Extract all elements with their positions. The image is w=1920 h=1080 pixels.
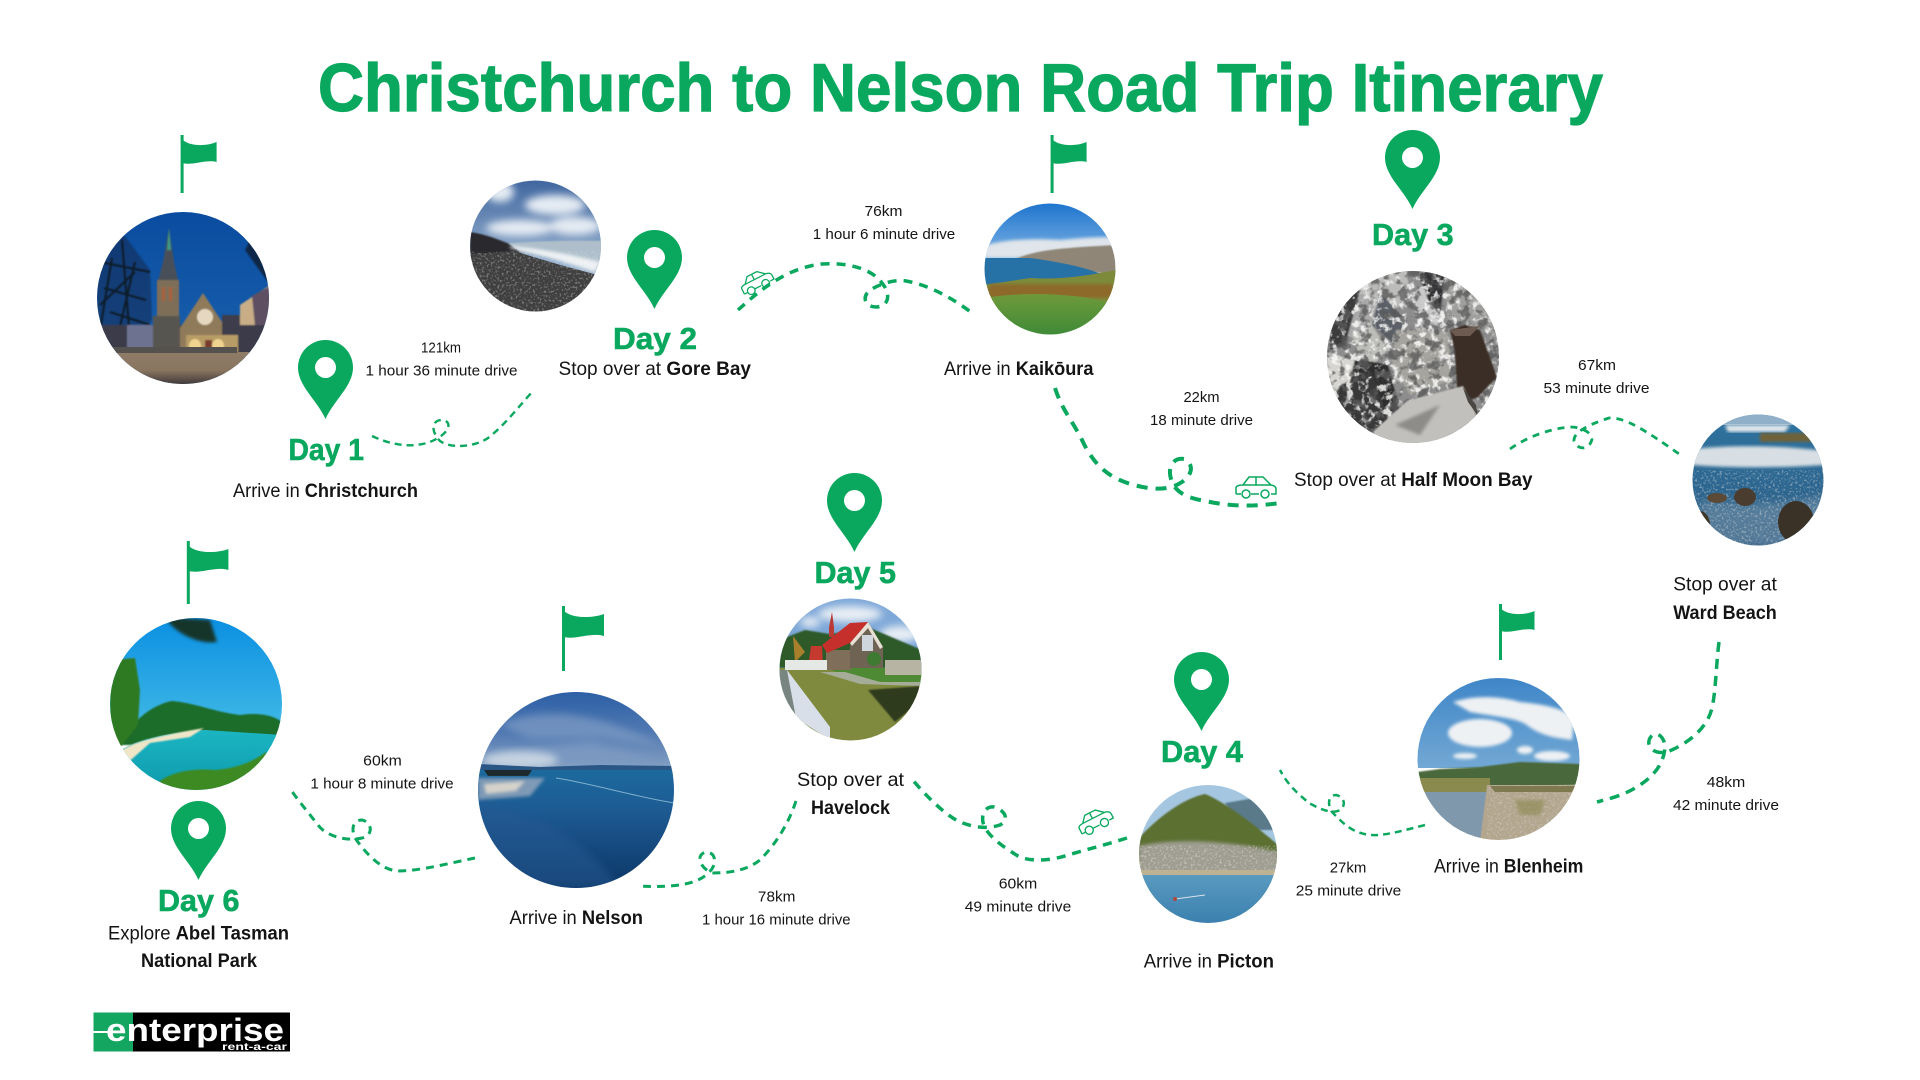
text: Arrive in Nelson: Arrive in Nelson — [510, 907, 643, 929]
route: Gore Bay to Kaikoura — [738, 264, 972, 313]
heading: Day 6: Day 6 — [158, 883, 240, 918]
text: Stop over at Ward Beach: Ward Beach — [1673, 602, 1777, 624]
text: distance Havelock to Nelson — [702, 889, 851, 929]
logo: enterprise rent-a-car: enterprise — [106, 1012, 284, 1048]
text: Arrive in Picton: Arrive in Picton — [1144, 951, 1274, 973]
text: Arrive in Christchurch: Arrive in Christchurch — [233, 480, 418, 502]
text: distance Havelock to Picton: 60km — [999, 876, 1037, 892]
logo: enterprise rent-a-car: rent-a-car — [222, 1041, 287, 1053]
text: distance Picton to Blenheim: 25 minute drive — [1296, 883, 1401, 900]
text: Arrive in Blenheim: Arrive in Blenheim — [1434, 856, 1583, 878]
text: distance Gore Bay to Kaikoura: 76km — [864, 203, 902, 220]
text: distance Havelock to Nelson: 78km — [758, 889, 795, 906]
photo: Blenheim river — [1417, 678, 1580, 842]
route: Nelson to Abel Tasman — [291, 790, 475, 871]
icon: flag Blenheim — [1499, 604, 1534, 660]
text: distance Christchurch to Gore Bay: 1 hour 36 minute drive — [366, 363, 518, 380]
text: distance Nelson to Abel Tasman: 60km — [363, 753, 402, 770]
icon: flag Kaikoura — [1051, 135, 1087, 193]
icon: pin Day 2 — [627, 230, 682, 309]
heading: Day 2: Day 2 — [613, 321, 697, 356]
icon: car — [1236, 477, 1276, 498]
text: distance Half Moon Bay to Ward Beach: 53 minute drive — [1544, 380, 1650, 397]
heading: Day 1: Day 1 — [288, 432, 364, 467]
route: Havelock to Nelson — [637, 801, 796, 886]
route: Christchurch to Gore Bay — [372, 391, 533, 446]
icon: pin Day 5 — [827, 473, 882, 552]
icon: pin Day 3 — [1385, 130, 1440, 209]
route: Half Moon Bay to Ward Beach — [1510, 418, 1682, 456]
text: Stop over at Havelock — [797, 769, 905, 819]
text: distance Ward Beach to Blenheim — [1673, 774, 1779, 814]
text: distance Ward Beach to Blenheim: 42 minute drive — [1673, 797, 1779, 814]
photo: Gore Bay — [470, 180, 602, 312]
text: Stop over at Gore Bay: Stop over at Gore Bay — [558, 358, 751, 380]
text: distance Gore Bay to Kaikoura: 1 hour 6 minute drive — [813, 226, 955, 243]
text: distance Picton to Blenheim — [1296, 860, 1401, 900]
text: Explore Abel Tasman National Park — [108, 922, 289, 972]
photo: Kaikoura — [984, 203, 1116, 335]
text: distance Havelock to Nelson: 1 hour 16 minute drive — [702, 912, 851, 929]
route: Picton to Havelock — [912, 779, 1127, 860]
icon: flag Christchurch — [181, 135, 217, 193]
photo: Half Moon Bay seal on rocks — [1325, 270, 1500, 445]
photo: Ward Beach — [1690, 414, 1824, 546]
text: distance Picton to Blenheim: 27km — [1330, 860, 1366, 877]
icon: pin Day 1 — [298, 340, 353, 419]
text: distance Christchurch to Gore Bay — [366, 340, 518, 380]
text: distance Christchurch to Gore Bay: 121km — [421, 340, 461, 357]
text: Stop over at Havelock: Havelock — [811, 797, 890, 819]
route: Kaikoura to Half Moon Bay — [1055, 388, 1280, 506]
icon: car — [1075, 804, 1115, 838]
text: Explore Abel Tasman National Park: Explore Abel Tasman — [108, 922, 289, 944]
heading: Day 5: Day 5 — [814, 555, 896, 590]
text: Stop over at Havelock: Stop over at — [797, 769, 905, 791]
text: Arrive in Kaikoura: Arrive in Kaikōura — [944, 358, 1094, 380]
photo: Havelock church — [779, 598, 922, 745]
icon: car — [738, 266, 776, 298]
heading: Day 4: Day 4 — [1161, 734, 1244, 769]
text: distance Ward Beach to Blenheim: 48km — [1707, 774, 1745, 791]
text: Explore Abel Tasman National Park: National Park — [141, 950, 257, 972]
text: Stop over at Half Moon Bay: Stop over at Half Moon Bay — [1294, 469, 1533, 491]
text: Stop over at Ward Beach — [1673, 574, 1777, 624]
icon: flag Abel Tasman — [187, 541, 228, 604]
photo: Nelson beach — [478, 692, 675, 890]
photo: Abel Tasman — [110, 617, 282, 795]
text: distance Gore Bay to Kaikoura — [813, 203, 955, 243]
text: distance Half Moon Bay to Ward Beach: 67km — [1578, 357, 1616, 374]
text: distance Havelock to Picton: 49 minute drive — [965, 898, 1071, 916]
text: distance Havelock to Picton — [965, 876, 1071, 916]
title: Christchurch to Nelson Road Trip Itinerary — [318, 50, 1603, 126]
heading: Day 3: Day 3 — [1372, 217, 1454, 252]
text: distance Nelson to Abel Tasman: 1 hour 8 minute drive — [310, 776, 454, 793]
icon: pin Day 6 — [171, 801, 226, 880]
logo: enterprise rent-a-car — [94, 1012, 290, 1053]
route: Ward Beach to Blenheim — [1597, 642, 1719, 802]
text: distance Half Moon Bay to Ward Beach — [1544, 357, 1650, 397]
photo: Christchurch Cathedral — [97, 212, 270, 385]
route: Blenheim to Picton — [1280, 770, 1425, 835]
icon: pin Day 4 — [1174, 652, 1229, 731]
text: distance Kaikoura to Half Moon Bay: 22km — [1184, 389, 1220, 406]
text: distance Nelson to Abel Tasman — [310, 753, 454, 793]
photo: Picton harbour — [1139, 785, 1280, 925]
text: Stop over at Ward Beach: Stop over at — [1673, 574, 1777, 596]
icon: flag Nelson — [562, 606, 604, 671]
text: distance Kaikoura to Half Moon Bay: 18 minute drive — [1150, 412, 1253, 429]
text: distance Kaikoura to Half Moon Bay — [1150, 389, 1253, 429]
